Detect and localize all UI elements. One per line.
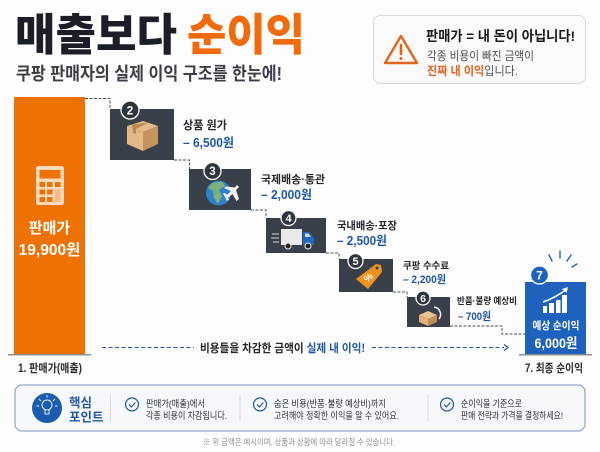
icon: growth chart — [543, 287, 568, 313]
step 4 label: 국내배송·포장 — [337, 219, 397, 232]
step 3: international shipping — [189, 162, 325, 210]
icon: shine rays — [549, 251, 577, 267]
connector lines — [85, 98, 525, 334]
icon: cardboard box — [127, 121, 158, 151]
icon: light bulb — [32, 393, 62, 423]
point 1 — [126, 398, 227, 422]
point 2: 숨은 비용(반품·불량 예상비)까지 — [274, 398, 386, 410]
bar label: 1. 판매가(매출) — [18, 361, 82, 375]
callout body: 각종 비용이 빠진 금액이 — [427, 49, 534, 63]
panel: sale price bar — [14, 97, 85, 354]
point 1: 각종 비용이 차감됩니다. — [146, 410, 227, 422]
step 5: coupang fee — [339, 254, 449, 292]
step 3 amount: – 2,000원 — [261, 188, 312, 202]
final profit label: 7. 최종 순이익 — [525, 361, 583, 375]
badge 3: 3 — [209, 166, 216, 178]
step 5 label: 쿠팡 수수료 — [403, 260, 449, 272]
icon: returned box — [419, 307, 441, 326]
step 6 label: 반품·불량 예상비 — [457, 295, 517, 306]
step 5 amount: – 2,200원 — [403, 272, 446, 286]
footnote: ※ 위 금액은 예시이며, 상품과 상황에 따라 달라질 수 있습니다. — [203, 437, 395, 447]
icon: calculator — [36, 166, 64, 205]
sale price label: 판매가 — [29, 220, 70, 237]
net profit value: 6,000원 — [534, 335, 578, 351]
step 4: domestic shipping — [266, 210, 397, 253]
step 2: product cost — [110, 101, 234, 160]
point 1: 판매가(매출)에서 — [146, 399, 205, 410]
badge 4: 4 — [285, 213, 292, 225]
step 2 label: 상품 원가 — [183, 118, 227, 132]
point 3: 판매 전략과 가격을 결정하세요! — [461, 410, 563, 422]
subtitle: 쿠팡 판매자의 실제 이익 구조를 한눈에! — [16, 64, 282, 84]
panel: net profit — [525, 251, 586, 355]
point 3: 순이익을 기준으로 — [461, 398, 522, 410]
callout body: 진짜 내 이익입니다. — [427, 64, 518, 78]
key points heading: 핵심 — [69, 395, 92, 410]
point 3 — [440, 398, 563, 422]
title: 매출보다 — [15, 11, 177, 60]
panel: key points — [15, 385, 585, 431]
step 2 amount: – 6,500원 — [183, 136, 234, 150]
callout: warning — [374, 16, 586, 84]
net profit label: 예상 순이익 — [532, 319, 580, 332]
point 2 — [254, 398, 399, 422]
badge 6: 6 — [420, 293, 426, 305]
icon: percent tag: % — [362, 271, 376, 285]
title: 순이익 — [187, 11, 305, 60]
icon: warning triangle — [385, 36, 417, 63]
badge 7: 7 — [536, 268, 543, 282]
step 6: returns allowance — [407, 291, 517, 327]
title — [15, 11, 305, 60]
step 4 amount: – 2,500원 — [337, 234, 387, 248]
callout heading: 판매가 = 내 돈이 아닙니다! — [426, 28, 575, 44]
profit flow arrow — [102, 341, 508, 355]
sale price value: 19,900원 — [19, 241, 80, 259]
point 2: 고려해야 정확한 이익을 알 수 있어요. — [274, 410, 399, 422]
key points heading — [69, 395, 104, 424]
flow caption: 비용들을 차감한 금액이 실제 내 이익! — [200, 341, 365, 355]
badge 2: 2 — [127, 104, 134, 118]
step 3 label: 국제배송·통관 — [261, 172, 325, 186]
icon: delivery truck — [271, 229, 314, 249]
key points heading: 포인트 — [69, 410, 104, 424]
step 6 amount: – 700원 — [458, 309, 491, 323]
badge 5: 5 — [352, 256, 359, 268]
callout body — [427, 49, 534, 78]
icon: globe and plane — [206, 180, 239, 206]
